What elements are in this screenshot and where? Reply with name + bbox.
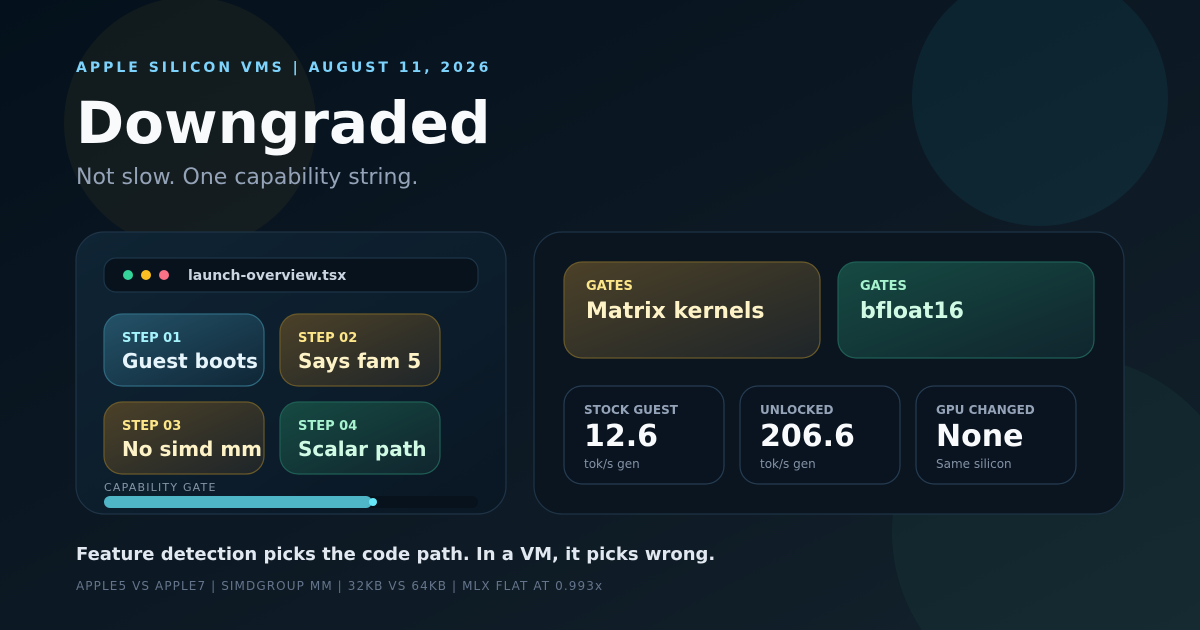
step 03: No simd mm <box>122 437 262 461</box>
title: Downgraded <box>76 89 490 157</box>
background circle: bottom right <box>892 356 1200 630</box>
step 04: Scalar path <box>298 437 427 461</box>
step 03: STEP 03 <box>122 419 181 434</box>
metric: gpu changed: None <box>936 419 1023 454</box>
background circle: teal <box>912 0 1168 226</box>
step 02: STEP 02 <box>298 331 357 346</box>
step 02 <box>280 314 440 386</box>
metric: stock guest: STOCK GUEST <box>584 403 679 417</box>
gate: bfloat16 <box>838 262 1094 358</box>
step 01: STEP 01 <box>122 331 181 346</box>
window dots <box>123 270 169 280</box>
step 01 <box>104 314 264 386</box>
metric: unlocked <box>740 386 900 484</box>
gate: matrix kernels: GATES <box>586 279 633 294</box>
takeaway: Feature detection picks the code path. In a VM, it picks wrong. <box>76 544 715 565</box>
file name: launch-overview.tsx <box>188 268 346 284</box>
window bar <box>104 258 478 292</box>
panel: gates and metrics <box>534 232 1124 514</box>
metric: gpu changed <box>916 386 1076 484</box>
gate: matrix kernels: Matrix kernels <box>586 299 765 324</box>
metric: stock guest: tok/s gen <box>584 457 640 471</box>
step 01: Guest boots <box>122 349 258 373</box>
step 03 <box>104 402 264 474</box>
progress bar <box>104 496 478 508</box>
step 04: STEP 04 <box>298 419 357 434</box>
panel: launch overview <box>76 232 506 514</box>
metric: gpu changed: GPU CHANGED <box>936 403 1035 417</box>
footnote: APPLE5 VS APPLE7 | SIMDGROUP MM | 32KB VS 64KB | MLX FLAT AT 0.993x <box>76 579 603 593</box>
step 02: Says fam 5 <box>298 349 421 373</box>
gate: bfloat16: GATES <box>860 279 907 294</box>
capability gate label: CAPABILITY GATE <box>104 481 217 494</box>
metric: unlocked: 206.6 <box>760 419 855 454</box>
background circle: amber <box>64 0 316 249</box>
subtitle: Not slow. One capability string. <box>76 165 418 190</box>
metric: unlocked: UNLOCKED <box>760 403 834 417</box>
metric: gpu changed: Same silicon <box>936 457 1012 471</box>
gate: bfloat16: bfloat16 <box>860 299 964 324</box>
step 04 <box>280 402 440 474</box>
metric: stock guest <box>564 386 724 484</box>
eyebrow: APPLE SILICON VMS | AUGUST 11, 2026 <box>76 60 491 76</box>
gate: matrix kernels <box>564 262 820 358</box>
metric: unlocked: tok/s gen <box>760 457 816 471</box>
metric: stock guest: 12.6 <box>584 419 658 454</box>
